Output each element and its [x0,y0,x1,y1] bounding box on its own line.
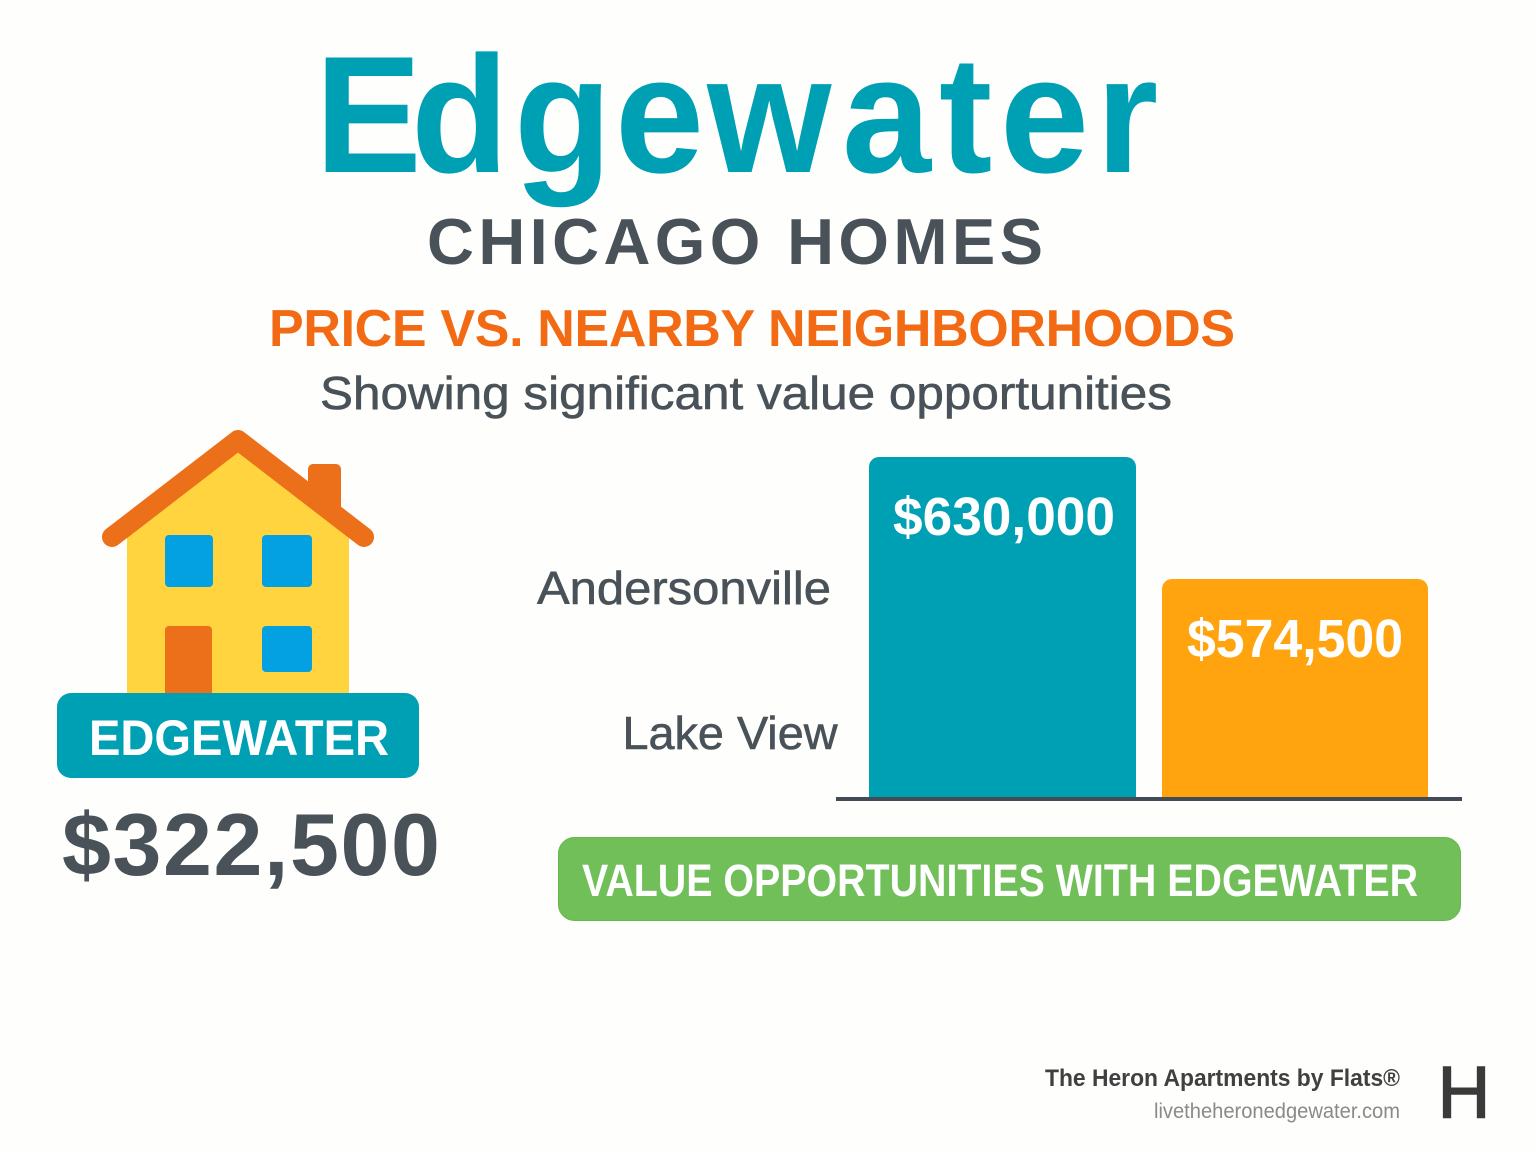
bar chart [537,457,1462,801]
heading: price comparison: PRICE VS. NEARBY NEIGHBORHOODS [269,300,1235,358]
bar: Lake View: $574,500 [1187,609,1403,669]
label: Lake View: Lake View [622,707,838,759]
callout: VALUE OPPORTUNITIES WITH EDGEWATER [582,855,1418,906]
title: Edgewater [315,21,1158,208]
label: Edgewater: EDGEWATER [89,710,389,766]
callout [558,838,1460,920]
footer: attribution: livetheheronedgewater.com [1154,1100,1400,1123]
subtitle: CHICAGO HOMES [427,205,1043,278]
axis [836,797,1462,801]
label: Edgewater [57,693,419,778]
icon: house [112,440,364,700]
bar: Lake View [1162,579,1428,799]
tagline: Showing significant value opportunities [320,367,1172,419]
bar: Andersonville [869,457,1136,799]
footer: attribution [1045,1065,1400,1123]
value: Edgewater price: $322,500 [62,795,440,894]
label: Andersonville: Andersonville [537,562,831,614]
bar: Andersonville: $630,000 [893,487,1115,547]
footer: attribution: The Heron Apartments by Flats® [1045,1065,1400,1092]
logo: H [1438,1052,1490,1134]
